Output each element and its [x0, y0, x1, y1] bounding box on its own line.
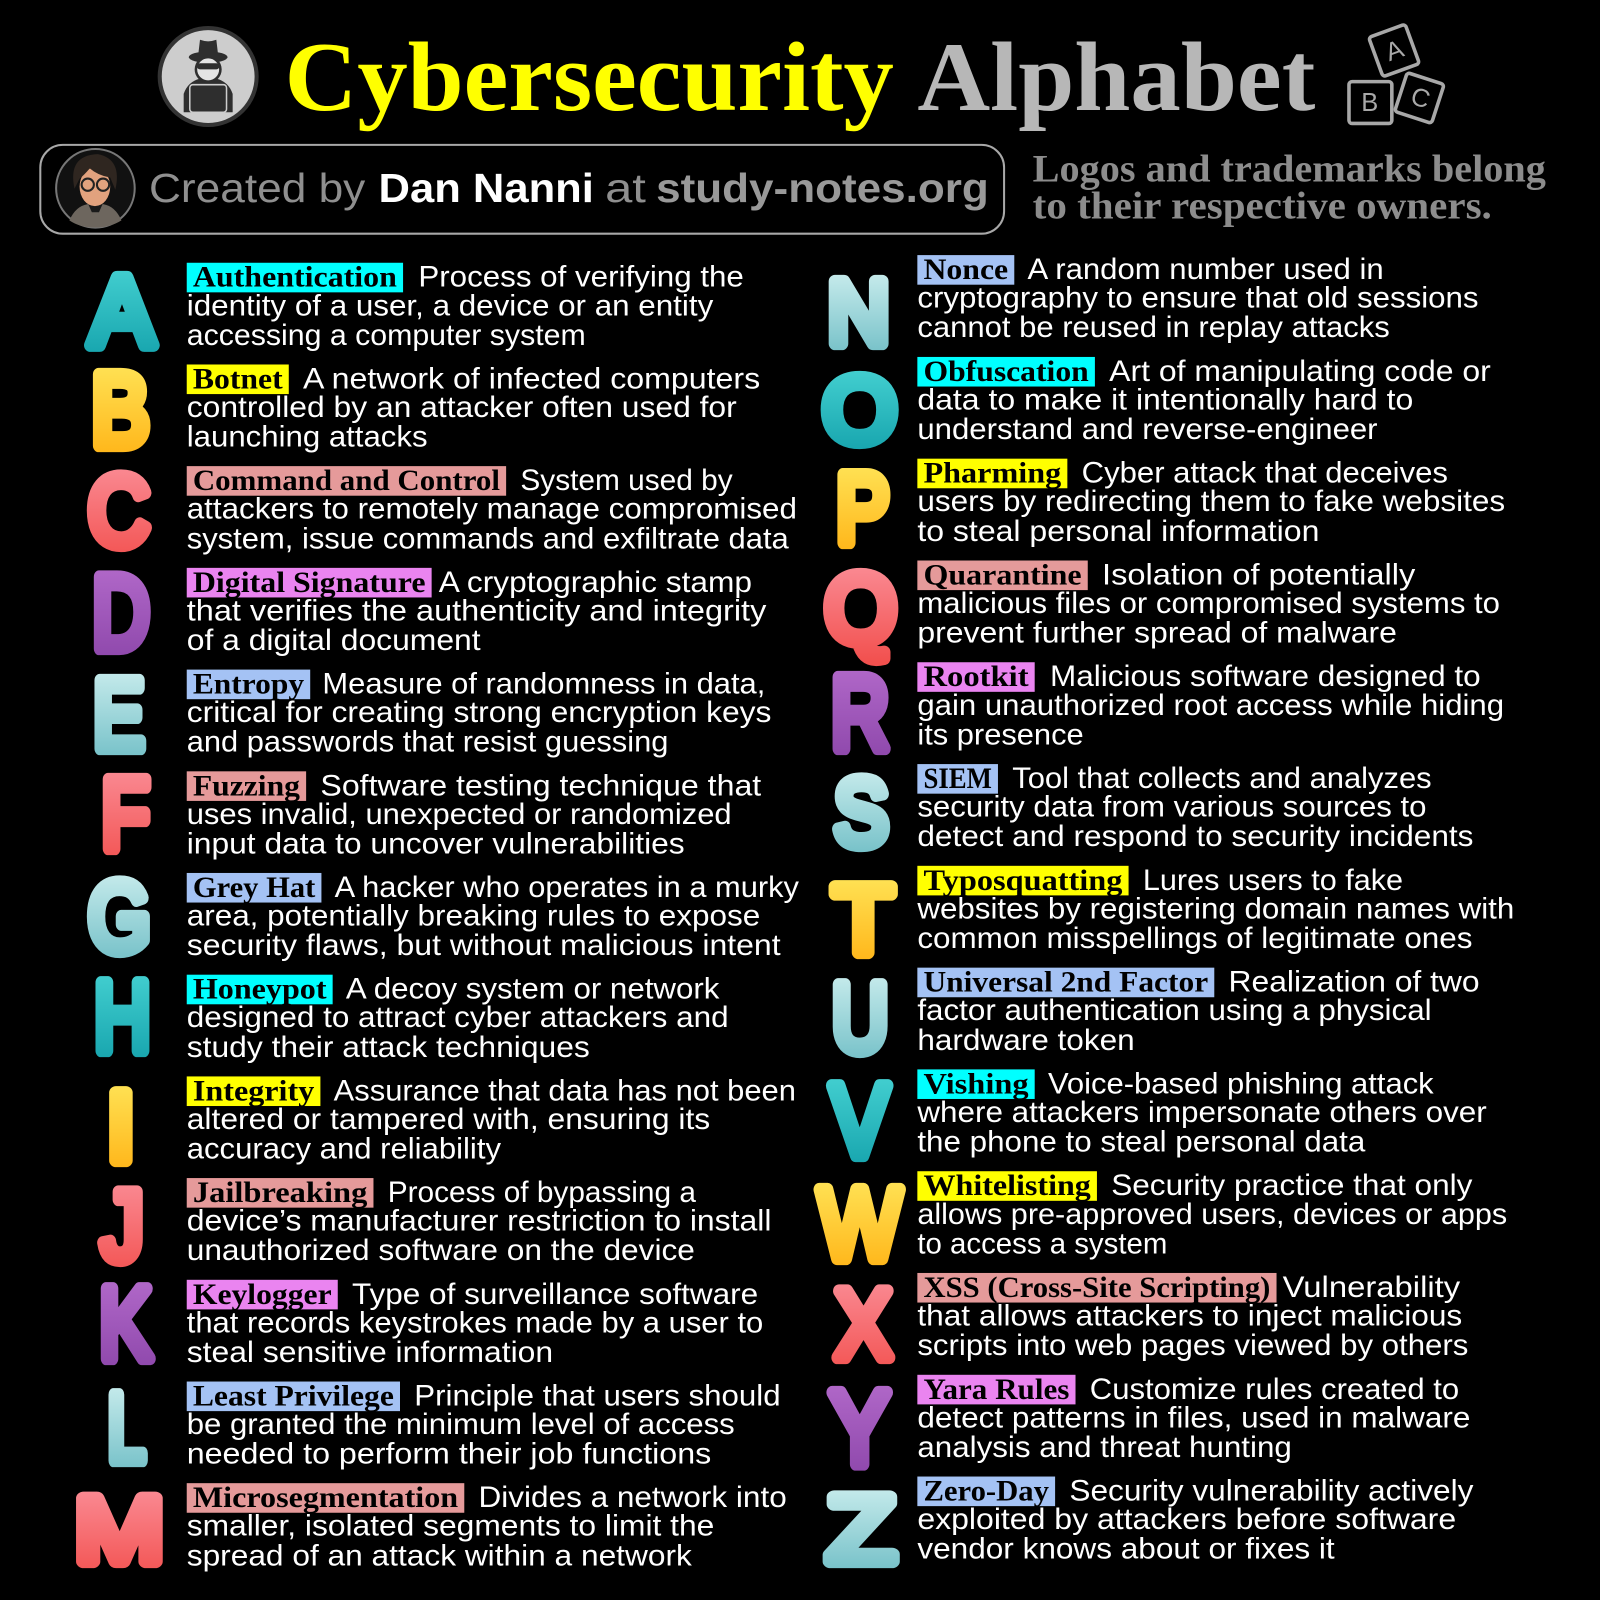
entry A: identity of a user, a device or an entity	[187, 289, 713, 322]
icon: ABC blocks: B	[1361, 89, 1378, 117]
entry T: Lures users to fake	[1143, 864, 1403, 897]
entry Y: Yara Rules	[923, 1374, 1069, 1406]
entry U: Universal 2nd Factor	[923, 967, 1208, 999]
entry O: data to make it intentionally hard to	[917, 383, 1413, 416]
disclaimer: Logos and trademarks belong	[1033, 148, 1546, 191]
entry H: H	[94, 962, 151, 1072]
entry E: critical for creating strong encryption keys	[187, 696, 771, 729]
entry G: G	[88, 862, 151, 972]
entry F: Software testing technique that	[320, 769, 761, 802]
entry I	[107, 1072, 796, 1182]
credit text: at	[605, 165, 647, 211]
entry W: Whitelisting	[923, 1170, 1091, 1202]
entry U: factor authentication using a physical	[917, 994, 1432, 1027]
entry D: that verifies the authenticity and integrity	[187, 594, 767, 627]
panel: left column A to M	[75, 256, 799, 1582]
entry D	[92, 555, 767, 671]
entry V	[831, 1066, 1487, 1178]
entry M: Microsegmentation	[193, 1482, 458, 1514]
entry B: A network of infected computers	[303, 362, 760, 395]
entry X: that allows attackers to inject malicious	[917, 1300, 1462, 1333]
entry Z	[827, 1475, 1474, 1582]
entry O: understand and reverse-engineer	[917, 413, 1378, 446]
entry R: its presence	[917, 718, 1084, 751]
entry L	[108, 1375, 781, 1482]
entry W	[819, 1169, 1507, 1281]
entry E: Entropy	[193, 669, 304, 701]
entry V: Vishing	[923, 1068, 1029, 1100]
entry L: Principle that users should	[414, 1380, 781, 1413]
entry X	[835, 1270, 1468, 1379]
entry R: Rootkit	[923, 661, 1029, 693]
entry U	[832, 965, 1480, 1072]
entry Q: malicious files or compromised systems to	[917, 587, 1500, 620]
entry L: Least Privilege	[193, 1381, 394, 1413]
disclaimer	[1033, 148, 1546, 227]
entry Z: Zero-Day	[923, 1476, 1049, 1508]
entry W: W	[819, 1169, 901, 1281]
entry H: designed to attract cyber attackers and	[187, 1001, 729, 1034]
entry T: websites by registering domain names with	[916, 892, 1514, 925]
entry K	[99, 1269, 763, 1381]
entry S: SIEM	[923, 763, 992, 795]
entry X: scripts into web pages viewed by others	[917, 1329, 1468, 1362]
entry X: X	[835, 1270, 891, 1379]
credit pill	[40, 145, 1004, 234]
entry O	[823, 355, 1491, 461]
entry N: A random number used in	[1028, 253, 1384, 286]
entry N: N	[828, 263, 889, 363]
entry G	[88, 862, 799, 972]
entry C: attackers to remotely manage compromised	[187, 493, 797, 526]
entry A: Process of verifying the	[418, 261, 744, 294]
title: Alphabet	[917, 23, 1315, 132]
icon: hacker	[160, 28, 257, 125]
entry S: S	[834, 759, 888, 864]
title	[285, 23, 1315, 132]
entry T	[833, 864, 1514, 974]
entry G: area, potentially breaking rules to expose	[187, 900, 760, 933]
entry G: A hacker who operates in a murky	[335, 871, 799, 904]
entry J: J	[102, 1171, 143, 1281]
entry L: needed to perform their job functions	[187, 1438, 711, 1471]
entry C	[88, 455, 797, 565]
entry D: D	[92, 555, 149, 671]
entry R: gain unauthorized root access while hiding	[917, 689, 1504, 722]
entry G: security flaws, but without malicious intent	[187, 929, 781, 962]
icon: ABC blocks: A	[1382, 35, 1407, 67]
entry M: Divides a network into	[479, 1481, 787, 1514]
entry F: uses invalid, unexpected or randomized	[187, 798, 732, 831]
entry N: Nonce	[923, 254, 1008, 286]
entry M: smaller, isolated segments to limit the	[187, 1510, 714, 1543]
entry U: hardware token	[917, 1024, 1135, 1057]
entry I: Assurance that data has not been	[334, 1074, 796, 1107]
entry C: System used by	[520, 464, 733, 497]
entry D: Digital Signature	[193, 567, 426, 599]
entry J	[102, 1171, 771, 1281]
entry M	[75, 1480, 787, 1582]
entry Q: prevent further spread of malware	[917, 617, 1397, 650]
entry U: Realization of two	[1229, 966, 1480, 999]
entry Y: Y	[830, 1371, 889, 1487]
entry F	[102, 758, 761, 870]
credit text: study-notes.org	[656, 165, 989, 211]
entry Z: Security vulnerability actively	[1069, 1475, 1474, 1508]
entry R: Malicious software designed to	[1050, 660, 1481, 693]
entry K: steal sensitive information	[187, 1336, 553, 1369]
entry J: Jailbreaking	[193, 1177, 368, 1209]
entry P: to steal personal information	[917, 515, 1319, 548]
entry C: system, issue commands and exfiltrate data	[187, 522, 789, 555]
entry W: Security practice that only	[1111, 1169, 1473, 1202]
entry I: altered or tampered with, ensuring its	[187, 1103, 710, 1136]
entry F: Fuzzing	[193, 770, 300, 802]
entry L: L	[108, 1375, 145, 1482]
entry M: M	[75, 1480, 164, 1582]
icon: ABC blocks: C	[1407, 82, 1433, 115]
entry P: Pharming	[923, 458, 1061, 490]
entry C: C	[88, 455, 149, 565]
entry H: A decoy system or network	[346, 973, 720, 1006]
icon: author avatar	[56, 149, 135, 228]
entry I: accuracy and reliability	[187, 1133, 501, 1166]
entry Q: Q	[825, 555, 896, 662]
entry E: and passwords that resist guessing	[187, 726, 668, 759]
entry S	[834, 759, 1473, 864]
entry C: Command and Control	[193, 465, 500, 497]
entry F: F	[102, 758, 149, 870]
entry H: study their attack techniques	[187, 1031, 590, 1064]
entry U: U	[832, 965, 888, 1072]
entry F: input data to uncover vulnerabilities	[187, 827, 685, 860]
entry V: V	[831, 1066, 888, 1178]
entry H: Honeypot	[193, 974, 327, 1006]
entry P	[836, 453, 1505, 563]
entry O: O	[823, 359, 896, 461]
entry X: Vulnerability	[1283, 1271, 1460, 1304]
entry Q: Isolation of potentially	[1102, 558, 1416, 591]
entry E: Measure of randomness in data,	[322, 668, 765, 701]
entry Y: Customize rules created to	[1090, 1373, 1459, 1406]
entry T: Typosquatting	[923, 865, 1123, 897]
credit text: Dan Nanni	[379, 165, 594, 211]
entry K: K	[99, 1269, 152, 1381]
entry B: B	[91, 352, 149, 467]
entry P: Cyber attack that deceives	[1082, 457, 1448, 490]
entry T: common misspellings of legitimate ones	[917, 922, 1472, 955]
entry A: Authentication	[193, 262, 397, 294]
title: Cybersecurity	[285, 23, 894, 132]
entry W: allows pre-approved users, devices or apps	[917, 1198, 1507, 1231]
entry G: Grey Hat	[193, 872, 315, 904]
entry Z: Z	[827, 1477, 895, 1582]
entry O: Obfuscation	[923, 356, 1089, 388]
entry S: detect and respond to security incidents	[917, 820, 1473, 853]
entry V: where attackers impersonate others over	[916, 1096, 1487, 1129]
entry N: cannot be reused in replay attacks	[917, 311, 1390, 344]
entry J: Process of bypassing a	[388, 1176, 696, 1209]
entry H	[94, 962, 729, 1072]
entry K: that records keystrokes made by a user to	[187, 1306, 763, 1339]
entry Z: vendor knows about or fixes it	[917, 1533, 1335, 1566]
entry V: Voice-based phishing attack	[1048, 1067, 1434, 1100]
panel: right column N to Z	[819, 253, 1514, 1582]
entry O: Art of manipulating code or	[1109, 355, 1491, 388]
entry D: A cryptographic stamp	[439, 566, 752, 599]
entry J: device’s manufacturer restriction to install	[187, 1205, 771, 1238]
entry Q	[825, 555, 1500, 662]
entry N	[828, 253, 1479, 363]
entry Q: Quarantine	[923, 559, 1082, 591]
entry R	[831, 655, 1504, 770]
entry D: of a digital document	[187, 624, 481, 657]
entry B: Botnet	[193, 363, 283, 395]
entry T: T	[833, 867, 893, 974]
entry J: unauthorized software on the device	[187, 1234, 695, 1267]
entry K: Keylogger	[193, 1279, 332, 1311]
credit text: Created by	[149, 165, 366, 211]
entry W: to access a system	[917, 1227, 1167, 1260]
entry B: launching attacks	[187, 421, 428, 454]
entry N: cryptography to ensure that old sessions	[917, 282, 1479, 315]
entry A: accessing a computer system	[187, 319, 586, 352]
credit text	[149, 165, 989, 211]
entry P: users by redirecting them to fake websites	[917, 485, 1505, 518]
entry Y	[830, 1371, 1470, 1487]
entry B: controlled by an attacker often used for	[187, 391, 737, 424]
entry I: I	[107, 1072, 135, 1182]
entry P: P	[836, 453, 889, 563]
entry Z: exploited by attackers before software	[917, 1503, 1456, 1536]
entry L: be granted the minimum level of access	[187, 1408, 735, 1441]
entry R: R	[831, 655, 889, 770]
disclaimer: to their respective owners.	[1033, 184, 1492, 227]
entry S: security data from various sources to	[917, 791, 1427, 824]
entry X: XSS (Cross-Site Scripting)	[923, 1272, 1270, 1304]
entry E: E	[93, 659, 144, 769]
entry M: spread of an attack within a network	[187, 1539, 692, 1572]
entry Y: analysis and threat hunting	[917, 1431, 1292, 1464]
entry I: Integrity	[193, 1075, 315, 1107]
entry B	[91, 352, 760, 467]
entry E	[93, 659, 771, 769]
entry A: A	[90, 256, 154, 366]
icon: ABC blocks	[1349, 24, 1444, 123]
entry A	[90, 256, 744, 366]
entry K: Type of surveillance software	[352, 1278, 758, 1311]
entry V: the phone to steal personal data	[917, 1126, 1366, 1159]
entry Y: detect patterns in files, used in malware	[917, 1401, 1470, 1434]
entry S: Tool that collects and analyzes	[1012, 762, 1432, 795]
